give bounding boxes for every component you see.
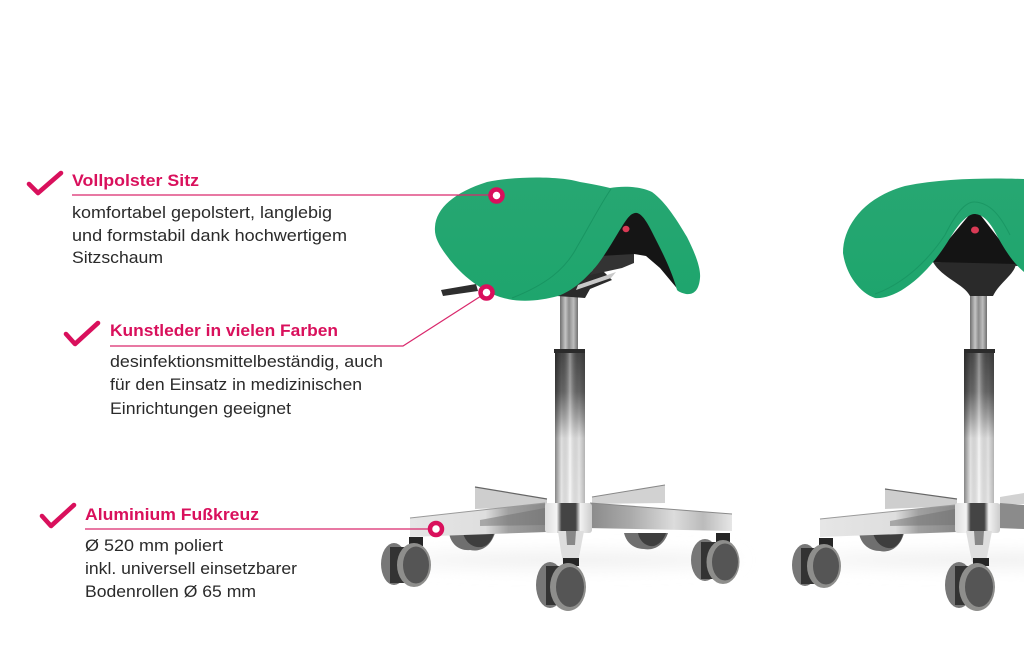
seat seam: [512, 189, 611, 298]
leader line: [85, 528, 430, 530]
marker: [480, 286, 492, 298]
heading: Vollpolster Sitz: [72, 171, 199, 190]
body text: komfortabel gepolstert, langlebig: [72, 203, 332, 222]
body text: [85, 536, 297, 601]
seat mechanism: [441, 208, 680, 298]
callout: Aluminium Fußkreuz: [42, 505, 442, 601]
icon: check mark: [42, 505, 74, 526]
body text: Ø 520 mm poliert: [85, 536, 223, 555]
rear caster: [859, 533, 904, 551]
front casters: [381, 533, 740, 611]
seat mechanism: [930, 208, 1020, 296]
saddle seat: [435, 178, 700, 301]
aluminium base arms: [820, 503, 1024, 562]
body text: Bodenrollen Ø 65 mm: [85, 582, 256, 601]
stool right: [792, 179, 1024, 611]
icon: check mark: [29, 173, 61, 193]
marker: [430, 523, 442, 535]
front casters: [792, 538, 995, 611]
callout: Vollpolster Sitz: [29, 171, 502, 267]
icon: check mark: [66, 323, 98, 344]
body text: Einrichtungen geeignet: [110, 399, 291, 418]
body text: für den Einsatz in medizinischen: [110, 375, 362, 394]
leader line: [110, 296, 481, 346]
seat seam: [875, 202, 1010, 294]
rear arms: [885, 489, 1024, 509]
floor shadow: [400, 552, 1024, 568]
body text: und formstabil dank hochwertigem: [72, 226, 347, 245]
gas spring column: [554, 292, 585, 508]
leader line: [72, 194, 490, 196]
body text: Sitzschaum: [72, 248, 163, 267]
marker: [490, 190, 502, 202]
body text: inkl. universell einsetzbarer: [85, 559, 297, 578]
heading: Kunstleder in vielen Farben: [110, 321, 338, 340]
body text: desinfektionsmittelbeständig, auch: [110, 352, 383, 371]
body text: [110, 352, 383, 418]
heading: Aluminium Fußkreuz: [85, 505, 259, 524]
gas spring column: [964, 292, 995, 508]
body text: [72, 203, 347, 267]
saddle seat: [843, 179, 1024, 298]
rear arms: [475, 485, 665, 509]
callout: Kunstleder in vielen Farben: [66, 286, 492, 418]
rear casters: [449, 533, 668, 551]
stool left: [381, 178, 740, 611]
aluminium base arms: [410, 503, 732, 562]
